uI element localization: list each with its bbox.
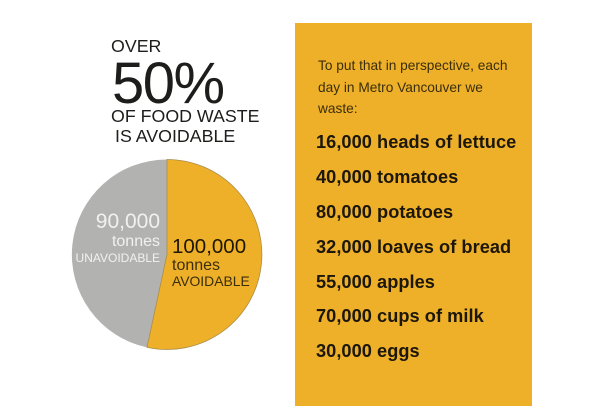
label: 100,000 tonnes avoidable: AVOIDABLE (172, 273, 250, 289)
pie slice: avoidable (147, 160, 262, 349)
list item: tomatoes: 40,000 tomatoes (316, 167, 458, 187)
heading figure: 50%: 50% (112, 51, 224, 116)
heading line: is avoidable: IS AVOIDABLE (115, 126, 235, 146)
intro text (318, 58, 507, 116)
label: 100,000 tonnes avoidable: tonnes (172, 257, 220, 274)
label: 90,000 tonnes unavoidable: 90,000 (96, 210, 160, 233)
list item: apples: 55,000 apples (316, 272, 435, 292)
heading: over 50% of food waste is avoidable (111, 36, 260, 146)
panel: daily waste in perspective (295, 23, 532, 406)
list item: lettuce: 16,000 heads of lettuce (316, 132, 516, 152)
list item: eggs: 30,000 eggs (316, 341, 420, 361)
label: 90,000 tonnes unavoidable (76, 210, 160, 265)
label: 90,000 tonnes unavoidable: tonnes (112, 233, 160, 250)
list item: potatoes: 80,000 potatoes (316, 202, 453, 222)
list item: milk: 70,000 cups of milk (316, 306, 484, 326)
heading line: over: OVER (111, 36, 161, 56)
list item: bread: 32,000 loaves of bread (316, 237, 511, 257)
intro text: day in Metro Vancouver we (318, 80, 483, 94)
heading line: of food waste: OF FOOD WASTE (111, 106, 260, 126)
pie slice: unavoidable (72, 159, 167, 347)
intro text: waste: (318, 101, 358, 116)
intro text: To put that in perspective, each (318, 58, 507, 73)
label: 100,000 tonnes avoidable (172, 235, 250, 289)
label: 90,000 tonnes unavoidable: UNAVOIDABLE (76, 251, 160, 265)
label: 100,000 tonnes avoidable: 100,000 (172, 235, 246, 258)
